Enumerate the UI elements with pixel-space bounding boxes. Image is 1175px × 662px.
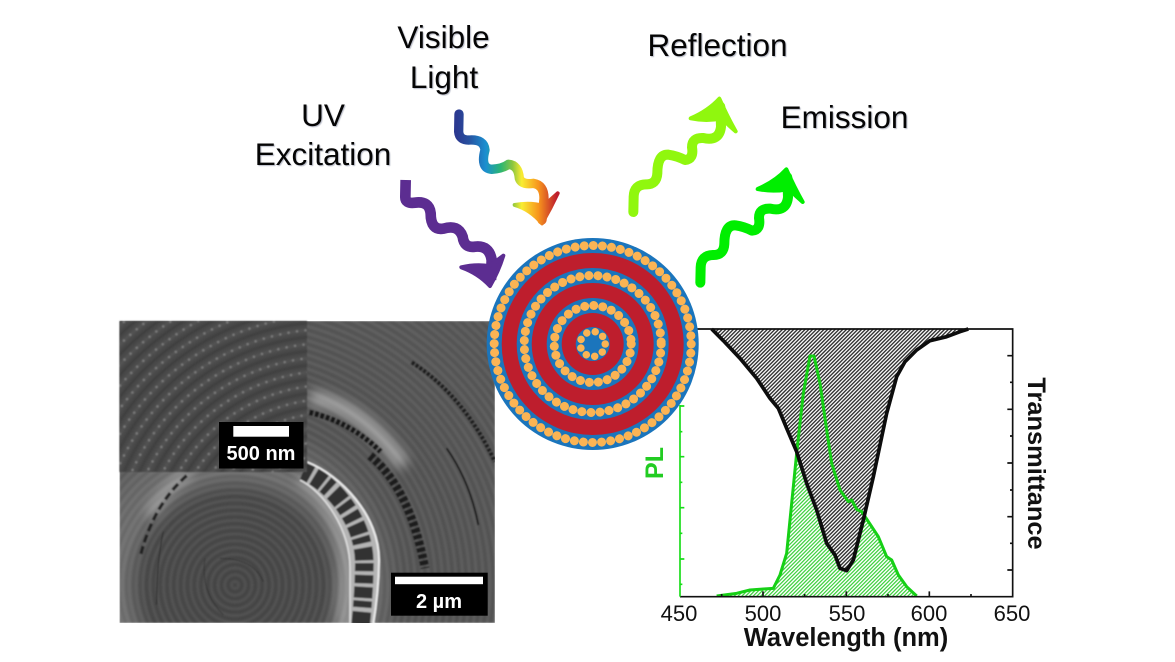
x axis tick labels — [661, 601, 1030, 626]
title label: UV Excitation: UV — [301, 97, 345, 133]
x axis tick labels: 650 — [994, 601, 1030, 626]
title label: Visible Light: Visible — [397, 19, 490, 55]
scale bar: 500 nm — [219, 422, 304, 468]
arrow: purple UV excitation wave — [405, 180, 503, 286]
bottom axis ticks — [722, 591, 971, 597]
cracks and porous bands — [141, 362, 495, 632]
title label: Reflection: Reflection — [647, 27, 788, 63]
diagram: concentric photonic sphere cross-section — [487, 238, 699, 450]
inset: high magnification SEM — [120, 321, 307, 472]
scale bar: 2 um — [391, 573, 488, 616]
x axis tick labels: 450 — [661, 601, 697, 626]
title label: Emission: Emission — [781, 99, 908, 135]
right axis ticks — [1007, 356, 1013, 570]
panel: SEM micrograph — [120, 321, 495, 632]
arrow: green emission wave — [700, 169, 803, 283]
right axis title: Transmittance — [1022, 377, 1050, 550]
left axis title: PL — [641, 447, 669, 479]
PL hatched area — [717, 356, 917, 596]
chart: PL and transmittance spectra — [641, 329, 1050, 652]
transmittance curve — [712, 329, 968, 571]
title label: UV Excitation — [255, 97, 391, 172]
title label: UV Excitation: Excitation — [255, 136, 391, 172]
chart frame — [680, 329, 1013, 597]
scale bar: 500 nm: 500 nm — [227, 443, 295, 465]
x axis tick labels: 500 — [745, 601, 781, 626]
title label: Visible Light — [397, 19, 490, 95]
arrow: lime reflection wave — [633, 99, 736, 212]
arrow: rainbow visible light wave — [459, 114, 558, 223]
left green PL axis — [680, 405, 684, 597]
PL curve — [717, 356, 917, 596]
x axis tick labels: 600 — [911, 601, 947, 626]
x axis tick labels: 550 — [829, 601, 865, 626]
title label: Visible Light: Light — [410, 59, 478, 95]
x axis title: Wavelength (nm) — [744, 624, 948, 652]
scale bar: 2 um: 2 µm — [416, 591, 462, 613]
transmittance hatched area — [712, 329, 968, 571]
